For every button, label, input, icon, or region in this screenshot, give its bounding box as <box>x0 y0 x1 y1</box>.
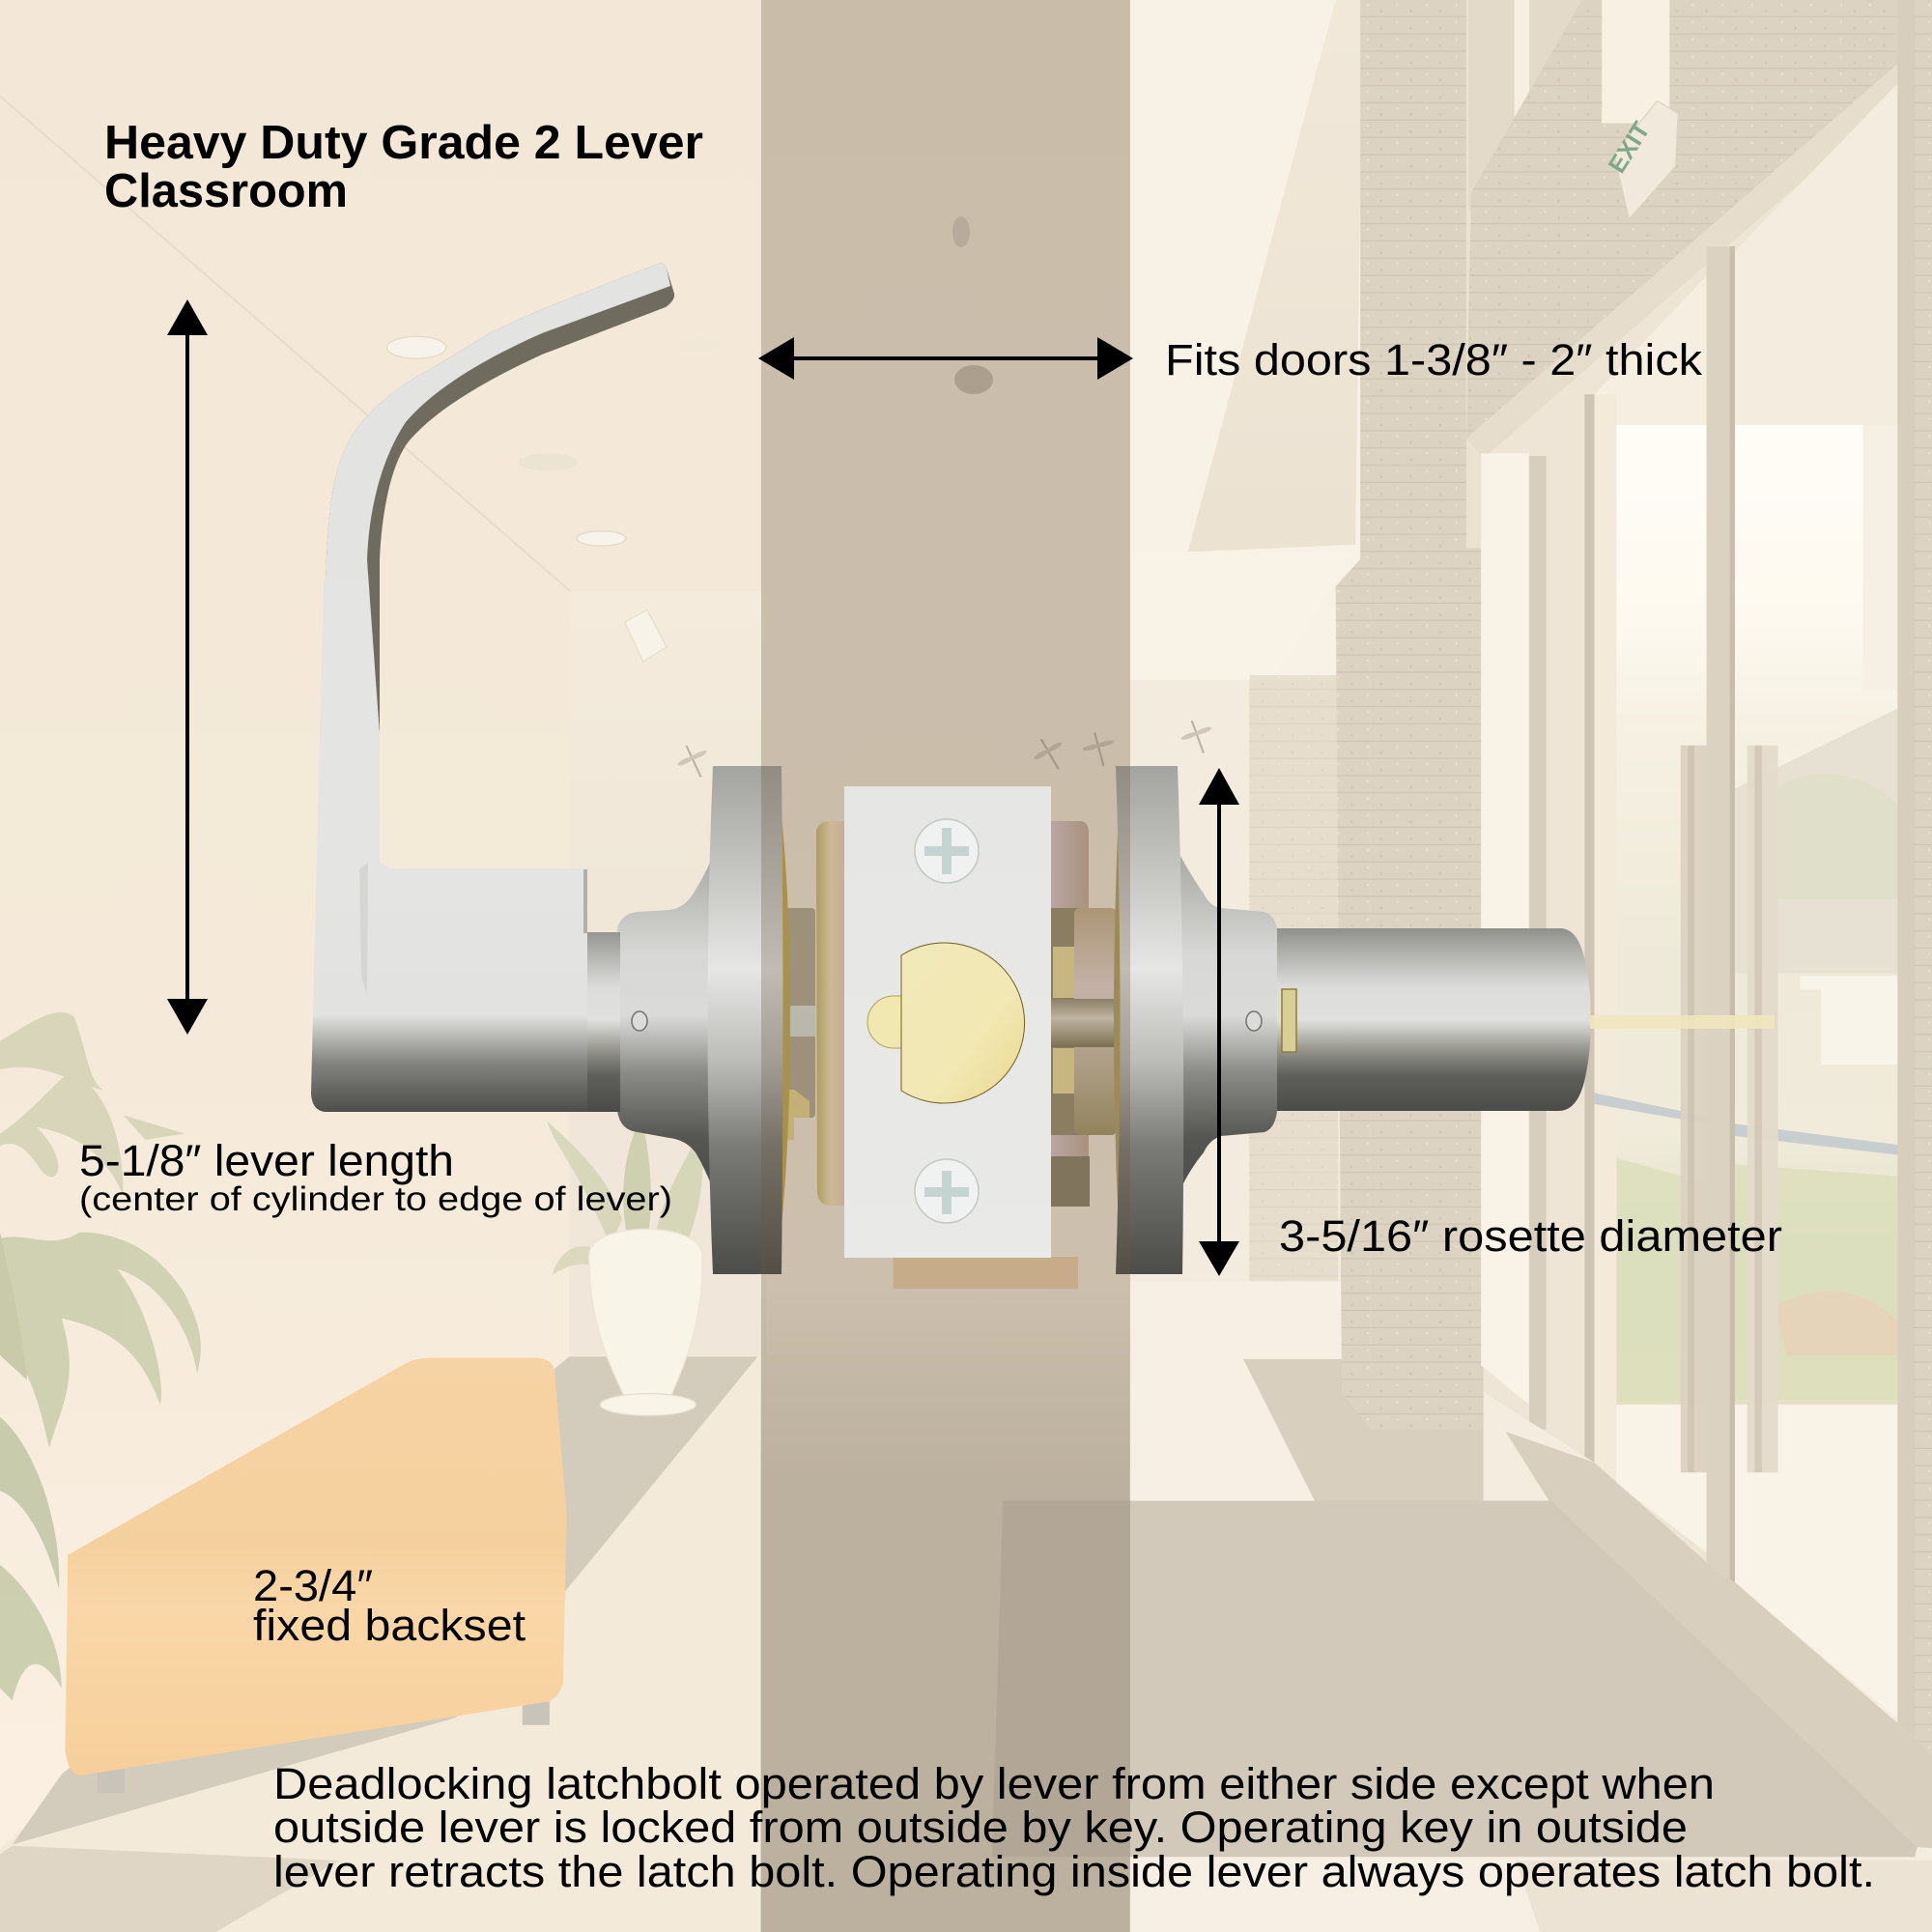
sprinkler on ceiling <box>952 216 970 247</box>
lever top face <box>324 264 670 869</box>
threaded screw post <box>773 1006 815 1037</box>
title: Heavy Duty Grade 2 Lever <box>104 117 703 169</box>
top screw <box>915 819 979 883</box>
glass pane right <box>1735 84 1897 1743</box>
right rosette plate <box>1116 766 1183 1274</box>
floor in door zone <box>760 1282 1130 1932</box>
dome camera on ceiling <box>954 365 993 394</box>
cylinder throat <box>587 932 620 1112</box>
exit sign <box>1604 101 1678 219</box>
lever fold <box>359 863 368 995</box>
bottom frame band <box>1506 1432 1932 1848</box>
label: rosette diameter: 3-5/16″ rosette diameter <box>1279 1211 1782 1261</box>
description paragraph: lever retracts the latch bolt. Operating inside lever always operates latch bolt. <box>273 1847 1875 1896</box>
floor beyond wall foot <box>1484 1392 1932 1932</box>
main column <box>1336 0 1484 1430</box>
right ceiling soffit <box>1130 0 1364 690</box>
bench legs <box>98 1767 125 1793</box>
faceplate <box>844 786 1051 1258</box>
white panel over beam <box>1602 0 1669 124</box>
beam frame strip <box>1466 64 1897 458</box>
title: Classroom <box>104 165 348 217</box>
bottom screw <box>915 1159 979 1223</box>
description paragraph <box>273 1759 1875 1896</box>
right rosette hole <box>1246 1011 1262 1031</box>
distant bench behind door <box>894 1257 1078 1289</box>
upper wall right <box>1466 0 1932 1430</box>
wall vase plant <box>547 1115 702 1282</box>
glossy path on floor <box>1243 1359 1552 1506</box>
label: backset: 2-3/4″ <box>253 1561 373 1610</box>
floor dark tile band <box>13 1356 757 1844</box>
left rosette neck <box>615 856 713 1189</box>
blue railing <box>1595 1093 1916 1157</box>
side window panel <box>1481 453 1529 1405</box>
vase <box>589 1229 702 1395</box>
right hub <box>1051 908 1082 1135</box>
description paragraph: Deadlocking latchbolt operated by lever from either side except when <box>273 1759 1715 1808</box>
right rosette neck <box>1180 856 1277 1189</box>
glass pane left <box>1595 251 1730 1571</box>
lever block edge <box>583 869 587 933</box>
inner hub left <box>771 908 815 1118</box>
track light <box>625 610 667 662</box>
inner disk right <box>1051 821 1089 1206</box>
label: lever length: 5-1/8″ lever length <box>79 1136 454 1185</box>
description paragraph: outside lever is locked from outside by key. Operating key in outside <box>273 1803 1688 1852</box>
back wall <box>569 591 766 1361</box>
spindle <box>1051 999 1117 1047</box>
left rosette gold back <box>763 766 790 1274</box>
left rosette plate <box>707 766 782 1274</box>
tailpiece <box>1590 1015 1775 1029</box>
bottom right floor <box>1516 1861 1932 1932</box>
inner disk left <box>816 821 844 1206</box>
label: lever length <box>79 1136 672 1218</box>
deadlatch tab <box>867 996 901 1048</box>
arrow: door thickness <box>758 337 1133 380</box>
rug <box>992 1501 1918 1857</box>
arrow: lever length <box>167 299 208 1035</box>
right floor <box>1130 1282 1932 1932</box>
floor <box>0 1355 1130 1932</box>
left rosette hole <box>632 1011 647 1031</box>
latch faceplate <box>844 216 1051 1258</box>
garden foliage <box>1616 1158 1905 1403</box>
ceiling edge <box>0 96 579 599</box>
recessed ceiling lights <box>387 336 720 546</box>
lever underside shadow <box>326 264 674 869</box>
bench body <box>66 1358 567 1776</box>
bench <box>66 1358 567 1793</box>
label: backset <box>253 1561 526 1650</box>
frames <box>1707 246 1735 1583</box>
lock assembly under the door <box>311 264 1775 1274</box>
dragonflies <box>672 715 1218 783</box>
lever <box>311 264 674 1112</box>
label: backset: fixed backset <box>253 1601 526 1650</box>
title <box>104 117 703 217</box>
soffit lower return <box>1130 552 1355 680</box>
arrow: rosette diameter <box>1199 768 1239 1276</box>
right knob cylinder <box>1275 928 1590 1111</box>
far column <box>1249 675 1338 1287</box>
gold bits left <box>771 1090 810 1140</box>
upper windows <box>1468 0 1605 210</box>
lever body <box>311 580 587 1112</box>
latchbolt <box>901 943 1025 1103</box>
plant leaves at left <box>0 1012 201 1700</box>
exit sign: EXIT <box>1604 117 1656 178</box>
label: door thickness: Fits doors 1-3/8″ - 2″ thick <box>1165 335 1703 384</box>
key cam <box>1282 989 1296 1052</box>
guard hut <box>1801 976 1906 1065</box>
gold bits right <box>1053 947 1074 1094</box>
label: lever length: (center of cylinder to edge of lever) <box>79 1180 672 1218</box>
door pull handles <box>1681 746 1778 1472</box>
door section overlay <box>761 0 1130 1932</box>
exterior building <box>1735 705 1905 974</box>
right rosette gold back <box>1114 773 1121 1267</box>
overhead brick beam <box>1466 0 1897 439</box>
right shaded wall <box>1188 0 1363 552</box>
paving outside <box>1616 1405 1905 1725</box>
